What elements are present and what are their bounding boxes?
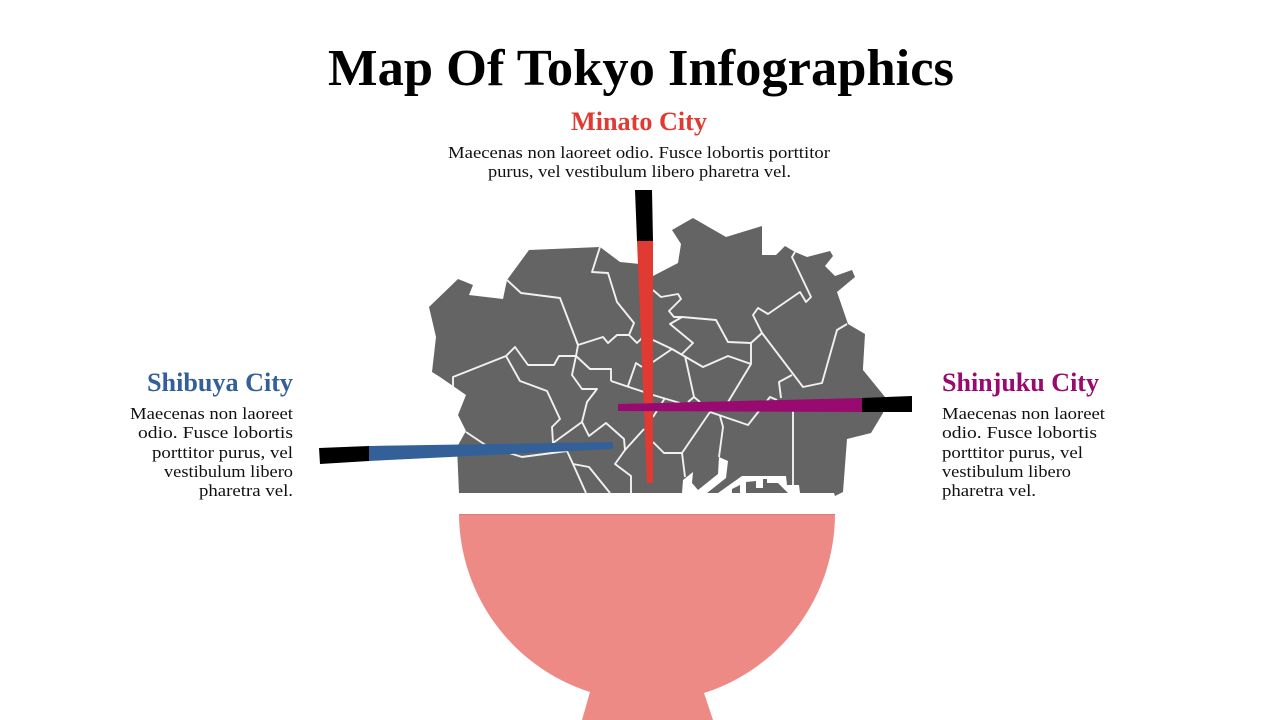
chopstick shaft: red	[637, 241, 653, 483]
chopstick tip: black	[862, 396, 912, 412]
text block: Shibuya description: Maecenas non laoreet	[130, 404, 293, 423]
text block: Minato description: purus, vel vestibulum libero pharetra vel.	[488, 162, 791, 181]
text block: Shinjuku description: vestibulum libero	[942, 462, 1071, 481]
bay and harbour	[682, 457, 800, 493]
chopstick: Shibuya	[319, 442, 613, 464]
callout: Minato City	[448, 107, 830, 181]
callout: Shibuya City	[130, 368, 293, 500]
bowl body and foot	[459, 514, 835, 720]
text block: Minato description	[448, 143, 830, 181]
heading: Shibuya City: Shibuya City	[147, 368, 293, 397]
title: Map Of Tokyo Infographics	[328, 40, 954, 97]
ward boundaries	[453, 247, 847, 493]
text block: Shinjuku description: porttitor purus, vel	[942, 443, 1083, 462]
chopstick: Shinjuku	[618, 396, 912, 412]
map of Tokyo	[429, 218, 885, 496]
text block: Shinjuku description: Maecenas non laoreet	[942, 404, 1105, 423]
chopstick tip: black	[635, 190, 653, 241]
text block: Minato description: Maecenas non laoreet odio. Fusce lobortis porttitor	[448, 143, 830, 162]
bowl rim	[459, 514, 835, 515]
text block: Shinjuku description: pharetra vel.	[942, 481, 1036, 500]
text block: Shinjuku description	[942, 404, 1105, 500]
text block: Shibuya description: vestibulum libero	[164, 462, 293, 481]
map landmass	[429, 218, 885, 496]
chopstick shaft: blue	[369, 442, 613, 461]
chopstick shaft: purple	[618, 398, 862, 412]
chopstick: Minato	[635, 190, 653, 483]
text block: Shinjuku description: odio. Fusce lobortis	[942, 423, 1097, 442]
text block: Shibuya description: porttitor purus, vel	[152, 443, 293, 462]
callout: Shinjuku City	[942, 368, 1105, 500]
heading: Minato City: Minato City	[571, 107, 707, 136]
bowl	[459, 514, 835, 720]
chopstick tip: black	[319, 446, 369, 464]
text block: Shibuya description: odio. Fusce lobortis	[138, 423, 293, 442]
text block: Shibuya description: pharetra vel.	[199, 481, 293, 500]
heading: Shinjuku City: Shinjuku City	[942, 368, 1099, 397]
text block: Shibuya description	[130, 404, 293, 500]
